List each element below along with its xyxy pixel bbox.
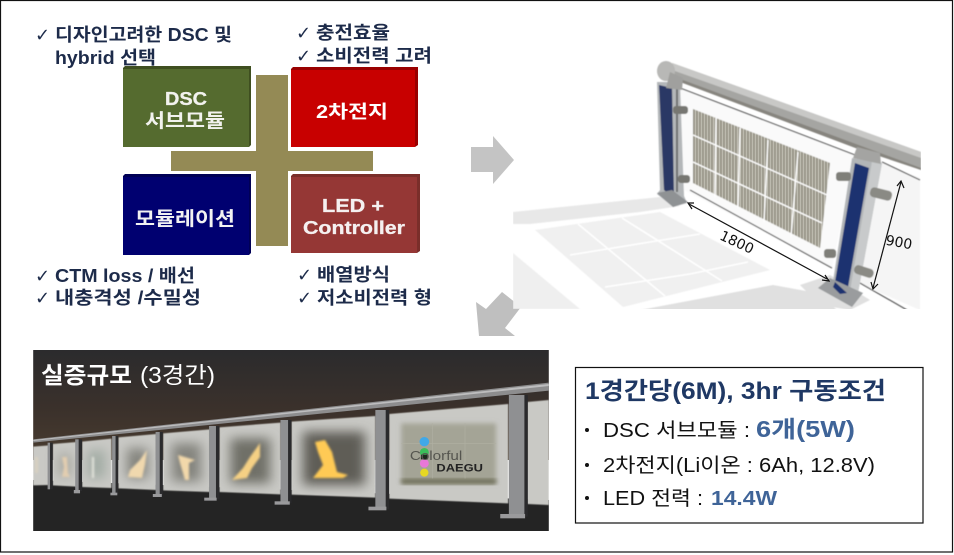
illustration: railing with dimensions <box>513 61 921 310</box>
photo title: (3경간) <box>140 362 215 388</box>
glass panels <box>680 88 920 310</box>
Colorful DAEGU logo <box>410 437 483 477</box>
checklist: DSC design: hybrid 선택 <box>55 48 156 68</box>
arrow: right <box>471 136 514 184</box>
right post <box>818 147 893 307</box>
panel shading <box>59 432 365 485</box>
handrail <box>657 61 921 170</box>
heading: 1경간당(6M), 3hr 구동조건 <box>585 378 886 405</box>
box: DSC sub-module: DSC <box>165 89 207 109</box>
glass panels <box>33 400 549 505</box>
checklist: battery: ✓ <box>296 23 311 44</box>
box: DSC sub-module <box>123 66 251 147</box>
dimension: 900 <box>871 181 913 289</box>
checklist: battery: 소비전력 고려 <box>316 46 432 66</box>
arrow: down-left <box>476 292 521 336</box>
handrail <box>33 383 549 443</box>
box: modulation <box>123 174 251 255</box>
panel: component cross diagram <box>123 66 420 255</box>
louver module <box>693 109 830 248</box>
cross connector <box>171 75 373 246</box>
item: LED power: LED 전력 : <box>603 487 703 510</box>
box: DSC sub-module: 서브모듈 <box>145 110 225 132</box>
checklist: DSC design: ✓ <box>35 25 50 46</box>
dimension: 900: 900 <box>884 233 913 253</box>
checklist: modulation: CTM loss / 배선 <box>55 266 195 286</box>
item: battery: 2차전지(Li이온 : 6Ah, 12.8V) <box>603 454 875 477</box>
checklist: modulation: 내충격성 /수밀성 <box>55 288 201 308</box>
night sky <box>33 350 549 460</box>
photo title: 실증규모 <box>41 362 132 388</box>
box: LED + controller: Controller <box>303 218 405 238</box>
checklist: DSC design <box>35 25 232 68</box>
floor shadow and tiles <box>513 197 870 310</box>
logo panel background <box>401 423 496 484</box>
checklist: LED controller: ✓ <box>297 265 312 286</box>
item: DSC sub-module: 6개(5W) <box>756 416 855 442</box>
Colorful DAEGU logo: Colorful <box>410 448 462 463</box>
item: DSC sub-module: DSC 서브모듈 : <box>603 419 750 442</box>
box: LED + controller: LED + <box>322 196 384 216</box>
box: secondary battery: 2차전지 <box>316 102 388 122</box>
photo: full-scale installation at night <box>33 350 549 531</box>
left post <box>657 82 690 207</box>
checklist: LED controller: ✓ <box>297 288 312 309</box>
checklist: DSC design: 디자인고려한 DSC 및 <box>55 25 232 45</box>
item: LED power <box>585 487 777 510</box>
Colorful DAEGU logo: DAEGU <box>436 463 483 475</box>
panel wires <box>680 88 920 310</box>
checklist: LED controller <box>297 265 432 309</box>
box: secondary battery <box>291 67 418 147</box>
item: LED power: 14.4W <box>711 488 777 510</box>
checklist: modulation: ✓ <box>35 266 50 287</box>
panel: operating conditions <box>576 368 923 523</box>
box: modulation: 모듈레이션 <box>135 208 235 230</box>
item: DSC sub-module <box>585 416 855 442</box>
posts <box>48 395 528 518</box>
dimension: 1800: 1800 <box>717 228 756 258</box>
checklist: LED controller: 배열방식 <box>317 265 390 285</box>
checklist: LED controller: 저소비전력 형 <box>317 288 432 308</box>
checklist: modulation <box>35 266 201 309</box>
checklist: battery: 충전효율 <box>316 23 390 43</box>
dimension: 1800 <box>688 203 829 281</box>
checklist: modulation: ✓ <box>35 288 50 309</box>
ground <box>33 480 549 531</box>
checklist: battery: ✓ <box>296 46 311 67</box>
bird figures <box>35 440 348 480</box>
checklist: battery <box>296 23 432 67</box>
box: LED + controller <box>291 174 420 253</box>
